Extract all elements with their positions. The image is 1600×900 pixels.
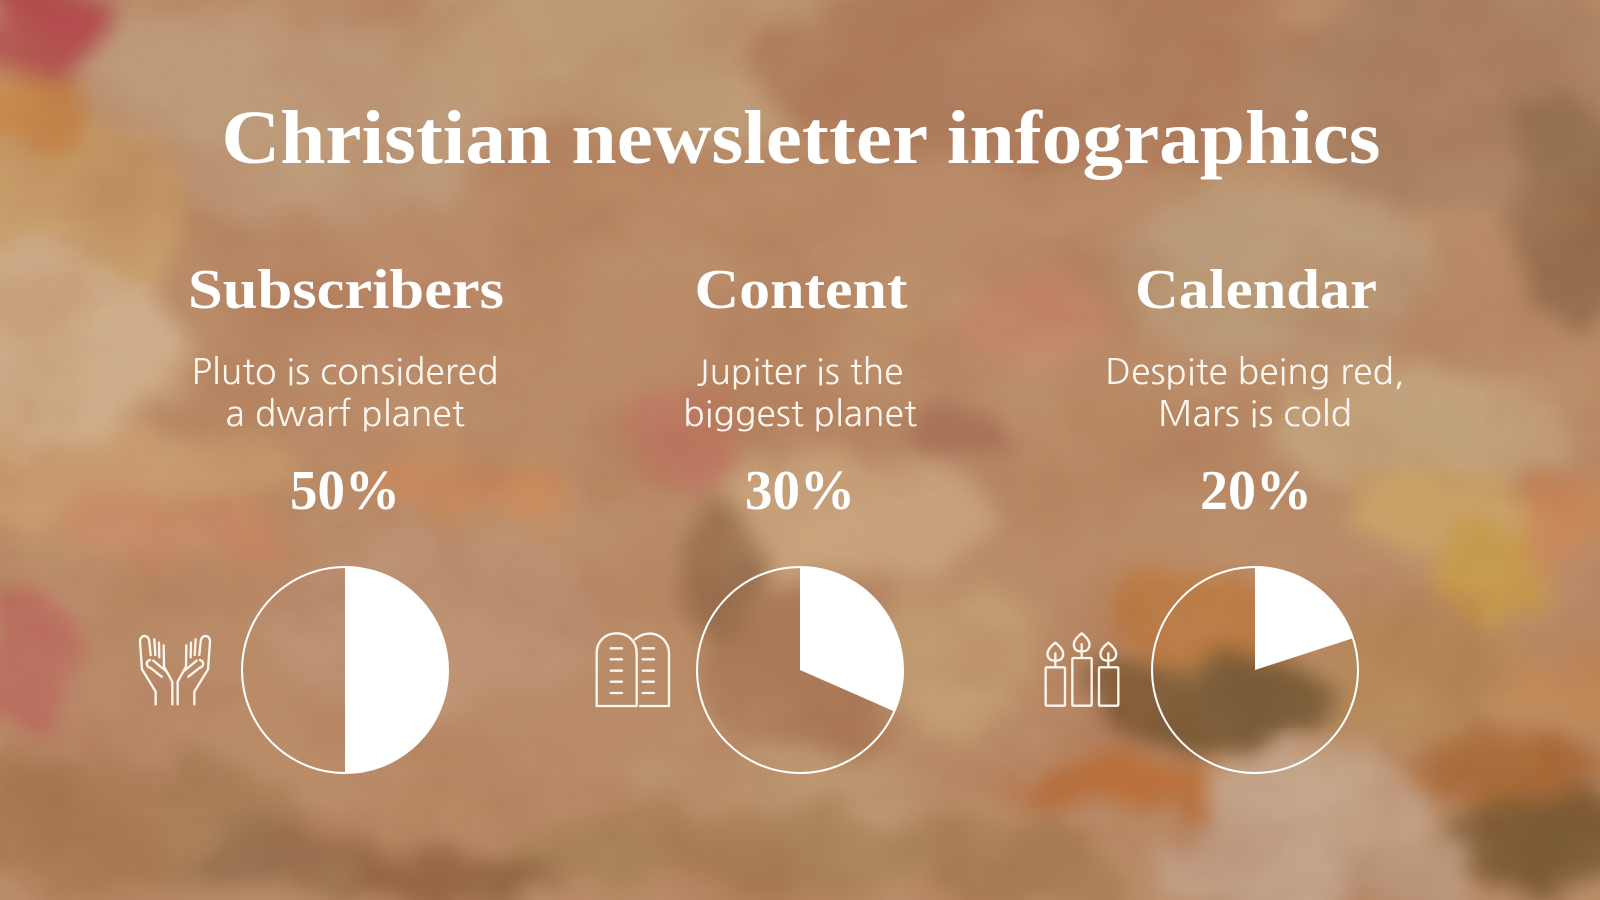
icon: stone tablets [597, 633, 669, 706]
icon: praying hands [140, 636, 210, 704]
text: Calendar description: Despite being red, [1105, 355, 1405, 390]
text: Calendar description: Mars is cold [1158, 397, 1352, 432]
text: Subscribers description: Pluto is considered [192, 355, 498, 390]
percentage: 20%: 20% [1200, 460, 1312, 522]
percentage: 50%: 50% [290, 460, 400, 522]
column: Calendar [1046, 259, 1405, 773]
column: Content [597, 259, 917, 773]
percentage: 30%: 30% [745, 460, 855, 522]
pie chart: 30% [697, 567, 903, 773]
heading: Calendar: Calendar [1135, 259, 1377, 321]
title: Christian newsletter infographics [222, 96, 1380, 180]
pie chart: 20% [1152, 567, 1358, 773]
text: Subscribers description: a dwarf planet [225, 396, 465, 432]
heading: Subscribers: Subscribers [188, 259, 504, 321]
icon: candles [1046, 633, 1118, 706]
text: Content description: Jupiter is the [697, 355, 903, 390]
column: Subscribers [140, 259, 504, 773]
text: Content description: biggest planet [683, 397, 917, 432]
heading: Content: Content [694, 259, 908, 321]
pie chart: 50% [242, 567, 448, 773]
